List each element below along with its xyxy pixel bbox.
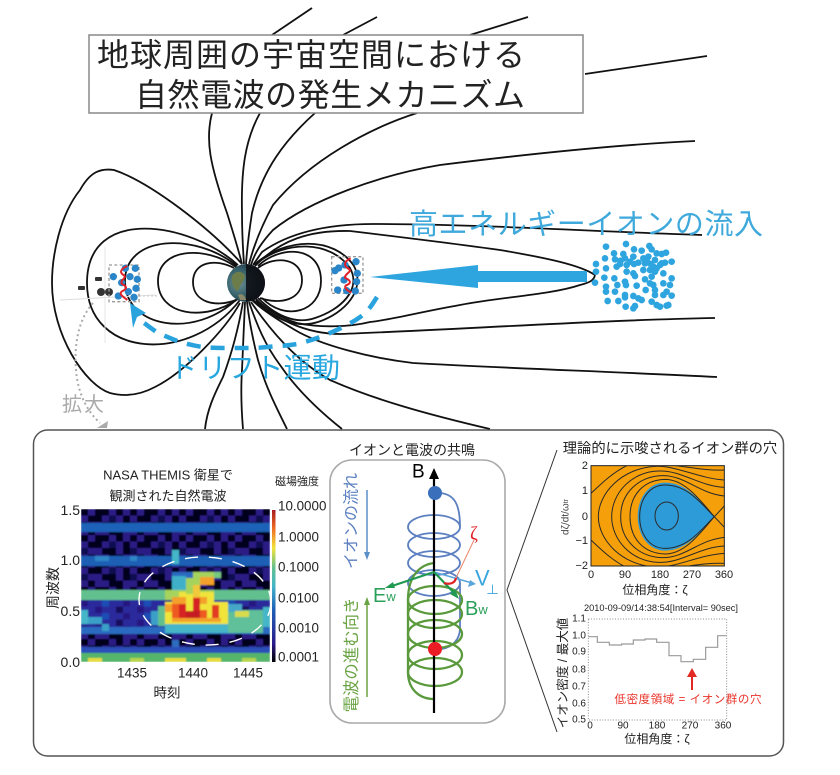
phase plot axes: 1 <box>582 485 588 497</box>
colour scale title: 磁場強度 <box>275 475 319 488</box>
title box: 地球周囲の宇宙空間における <box>97 37 525 73</box>
colour scale labels: 0.0010 <box>278 620 319 636</box>
density chart axes: イオン密度 / 最大値 <box>555 618 570 728</box>
right ion region <box>331 257 363 295</box>
title box <box>89 35 583 113</box>
density chart title: 2010-09-09/14:38:54[Interval= 90sec] <box>584 603 738 613</box>
ion flow label: イオンの流れ <box>342 473 360 569</box>
title box: 自然電波の発生メカニズム <box>135 77 525 113</box>
colour scale labels: 0.0001 <box>278 650 319 664</box>
wave direction label <box>343 597 370 712</box>
time axis <box>117 666 263 700</box>
zoom indicator <box>62 303 108 428</box>
colour scale labels: 10.0000 <box>278 498 326 514</box>
phase plot axes: dζ/dt/ωtr <box>560 498 572 535</box>
phase plot axes: 2 <box>582 460 588 472</box>
label: drift motion: ドリフト運動 <box>170 352 340 384</box>
colour bar <box>272 510 276 662</box>
callout: low density region: 低密度領域 = イオン群の穴 <box>614 692 762 706</box>
density chart axes: 位相角度：ζ <box>624 732 690 746</box>
phase plot axes: 360 <box>715 569 733 581</box>
time axis: 1440 <box>178 666 208 680</box>
phase angle zeta <box>444 524 478 584</box>
density chart axes: 0.7 <box>572 682 586 692</box>
density line chart <box>588 619 727 720</box>
density chart axes: 180 <box>649 720 666 732</box>
density chart axes: 1.1 <box>572 614 586 624</box>
arrow: drift motion <box>130 297 377 348</box>
zoom connector lines <box>507 450 557 732</box>
blue ion <box>428 486 442 500</box>
label: high-energy ion inflow: 高エネルギーイオンの流入 <box>409 208 763 241</box>
colour scale labels: 1.0000 <box>278 530 319 544</box>
density chart axes: 0.6 <box>572 698 586 710</box>
phase space plot <box>591 466 724 568</box>
density chart axes: 360 <box>715 720 732 732</box>
zoom indicator: 拡大 <box>62 393 104 416</box>
phase plot axes: −1 <box>575 535 588 547</box>
vector Bw: Bw <box>465 598 488 620</box>
phase plot axes: 90 <box>619 569 631 581</box>
phase plot axes: 270 <box>683 569 701 581</box>
resonance frame <box>330 460 505 723</box>
ion cloud <box>592 241 675 312</box>
colour scale labels: 0.0100 <box>278 590 319 606</box>
colour scale labels: 0.1000 <box>278 560 319 574</box>
ion flow label <box>342 473 370 569</box>
left ion region <box>109 265 141 302</box>
density chart axes: 90 <box>617 720 629 732</box>
magnetic field axis B: B <box>412 462 425 482</box>
frequency axis: 0.5 <box>61 603 80 619</box>
phase plot axes: −2 <box>575 560 588 572</box>
phase plot axes: 位相角度：ζ <box>622 583 688 597</box>
frequency axis: 周波数 <box>45 567 61 609</box>
vector V perpendicular: V <box>475 566 490 590</box>
vector Ew: Ew <box>373 585 396 607</box>
phase plot axes: 180 <box>651 569 669 581</box>
heat map <box>81 509 272 662</box>
density chart axes <box>555 614 732 746</box>
vector V perpendicular: ⊥ <box>486 582 499 598</box>
magnetic field axis B <box>412 462 439 713</box>
red ion <box>428 642 442 656</box>
callout: low density region <box>614 668 762 706</box>
panel: detail <box>34 430 784 756</box>
phase plot axes: 0 <box>588 569 594 581</box>
frequency axis <box>45 502 80 670</box>
ion helix <box>408 493 460 649</box>
vector Bw <box>434 572 488 620</box>
Earth <box>227 264 265 302</box>
arrow: ion inflow <box>370 265 587 288</box>
density chart axes: 270 <box>682 720 699 732</box>
vector Ew <box>373 572 434 607</box>
resonance title: イオンと電波の共鳴 <box>349 442 475 458</box>
density chart axes: 0.5 <box>572 714 586 726</box>
theory title: 理論的に示唆されるイオン群の穴 <box>563 440 777 457</box>
wave direction label: 電波の進む向き <box>343 598 361 712</box>
phase angle zeta: ζ <box>470 524 478 544</box>
magnetic field lines <box>52 8 717 429</box>
frequency axis: 1.0 <box>61 552 80 568</box>
spectrogram title: 観測された自然電波 <box>109 488 227 504</box>
frequency axis: 0.0 <box>61 654 80 670</box>
spectrogram title <box>103 468 233 504</box>
spectrogram title: NASA THEMIS 衛星で <box>103 468 233 482</box>
density chart axes: 0.9 <box>572 646 586 658</box>
time axis: 1445 <box>233 666 263 680</box>
colour scale labels <box>278 498 326 664</box>
density chart axes: 1.0 <box>572 630 586 642</box>
phase plot axes <box>560 460 733 597</box>
panel: ion-wave resonance <box>330 442 505 723</box>
panel: theoretical hole <box>555 440 777 746</box>
satellite orbit and spacecraft <box>60 247 157 343</box>
density chart axes: 0.8 <box>572 664 586 676</box>
wave helix <box>408 563 462 699</box>
frequency axis: 1.5 <box>61 502 80 518</box>
density chart axes: 0 <box>587 720 593 732</box>
phase plot axes: 0 <box>582 511 588 523</box>
vector V perpendicular <box>434 566 499 598</box>
time axis: 1435 <box>117 666 147 680</box>
time axis: 時刻 <box>154 686 180 700</box>
panel: THEMIS spectrogram <box>45 468 326 700</box>
